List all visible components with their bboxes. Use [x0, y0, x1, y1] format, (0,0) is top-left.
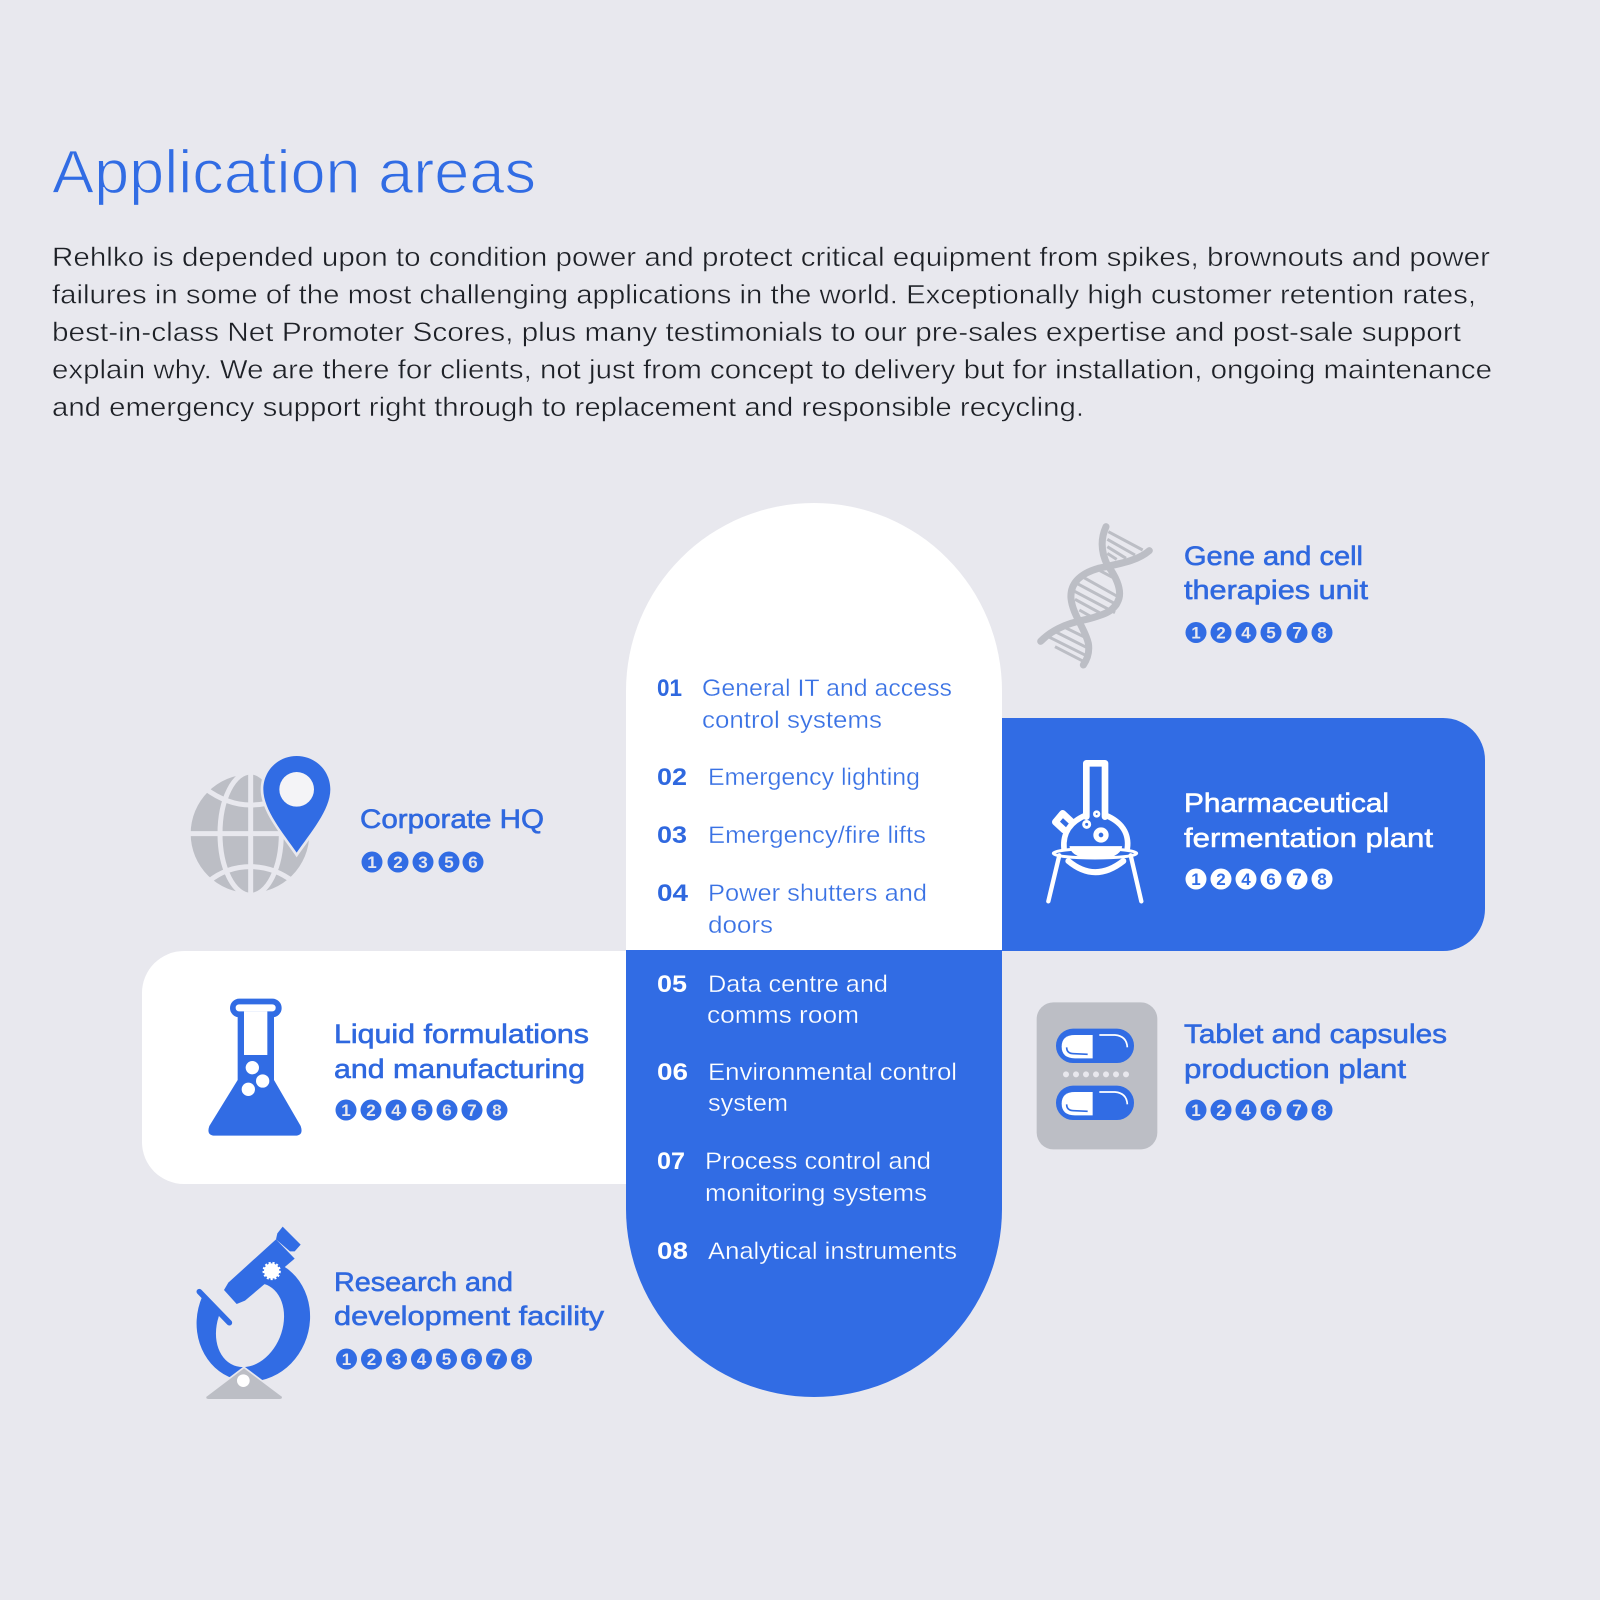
list: applications 01 to 04: Emergency lighting — [708, 764, 920, 791]
badges: tablet and capsules — [1186, 1100, 1332, 1120]
panel: liquid formulations white arm — [142, 951, 626, 1184]
badges: pharmaceutical: 4 — [1241, 870, 1251, 889]
badges: corporate HQ: 6 — [468, 853, 478, 872]
badges: liquid formulations — [336, 1100, 508, 1120]
badges: tablet and capsules: 1 — [1191, 1101, 1201, 1120]
icon: microscope — [183, 1227, 310, 1399]
title: Application areas — [52, 138, 536, 206]
badges: pharmaceutical: 8 — [1317, 870, 1327, 889]
list: applications 01 to 04: doors — [708, 912, 773, 939]
badges: pharmaceutical: 6 — [1266, 870, 1276, 889]
badges: tablet and capsules: 8 — [1317, 1101, 1327, 1120]
heading: Gene and cell therapies unit: therapies unit — [1184, 575, 1369, 605]
badges: liquid formulations: 4 — [391, 1101, 401, 1120]
badges: gene and cell: 8 — [1317, 624, 1327, 642]
intro paragraph: Rehlko is depended upon to condition power and protect critical equipment from spikes, brownouts and power — [52, 242, 1490, 272]
badges: gene and cell: 7 — [1292, 624, 1302, 642]
intro paragraph: and emergency support right through to replacement and responsible recycling. — [52, 392, 1084, 422]
heading: Tablet and capsules production plant — [1184, 1019, 1447, 1084]
badges: liquid formulations: 7 — [467, 1101, 477, 1120]
badges: pharmaceutical: 7 — [1292, 870, 1302, 889]
panel: centre pill top white — [626, 503, 1002, 950]
badges: tablet and capsules: 2 — [1216, 1101, 1226, 1120]
list: applications 01 to 04: control systems — [702, 707, 882, 734]
badges: tablet and capsules: 6 — [1266, 1101, 1276, 1120]
intro paragraph — [52, 242, 1492, 422]
list: applications 05 to 08: 06 — [657, 1059, 688, 1086]
list: applications 05 to 08: comms room — [707, 1002, 859, 1029]
heading: Pharmaceutical fermentation plant: fermentation plant — [1184, 823, 1434, 853]
badges: pharmaceutical: 1 — [1191, 870, 1201, 889]
icon: DNA helix — [1041, 527, 1149, 665]
list: applications 05 to 08: Data centre and — [708, 971, 888, 998]
badges: corporate HQ: 2 — [393, 853, 403, 872]
list: applications 05 to 08: system — [708, 1090, 788, 1117]
list: applications 05 to 08: 08 — [657, 1238, 688, 1265]
list: applications 01 to 04: 02 — [657, 764, 687, 791]
list: applications 05 to 08: Analytical instruments — [708, 1238, 957, 1265]
list: applications 01 to 04 — [657, 675, 952, 939]
badges: research and development: 1 — [342, 1350, 351, 1369]
badges: corporate HQ — [362, 852, 484, 872]
badges: research and development: 2 — [367, 1350, 376, 1369]
badges: liquid formulations: 2 — [366, 1101, 376, 1120]
badges: research and development: 3 — [392, 1350, 401, 1369]
heading: Tablet and capsules production plant: production plant — [1184, 1054, 1407, 1084]
list: applications 05 to 08: 05 — [657, 971, 687, 998]
panel: pharmaceutical blue arm — [1002, 718, 1485, 951]
list: applications 01 to 04: 01 — [657, 675, 682, 702]
badges: corporate HQ: 5 — [444, 853, 454, 872]
icon: capsules tile — [1037, 1002, 1157, 1149]
badges: corporate HQ: 1 — [367, 853, 377, 872]
list: applications 05 to 08: 07 — [657, 1148, 685, 1175]
panel: centre pill bottom blue — [626, 950, 1002, 1397]
list: applications 05 to 08: Process control and — [705, 1148, 931, 1175]
heading: Gene and cell therapies unit: Gene and cell — [1184, 541, 1363, 571]
badges: gene and cell: 4 — [1241, 624, 1251, 642]
badges: gene and cell — [1186, 622, 1332, 643]
list: applications 01 to 04: Emergency/fire lifts — [708, 822, 926, 849]
badges: liquid formulations: 8 — [492, 1101, 502, 1120]
badges: corporate HQ: 3 — [418, 853, 428, 872]
badges: research and development: 6 — [467, 1350, 476, 1369]
icon: fermentation flask — [1048, 763, 1141, 901]
icon: globe with location pin — [188, 756, 330, 895]
badges: tablet and capsules: 7 — [1292, 1101, 1302, 1120]
list: applications 01 to 04: Power shutters and — [708, 880, 927, 907]
heading: Corporate HQ: Corporate HQ — [360, 804, 544, 834]
list: applications 05 to 08 — [657, 971, 957, 1265]
list: applications 05 to 08: monitoring systems — [705, 1180, 927, 1207]
badges: liquid formulations: 5 — [417, 1101, 427, 1120]
badges: tablet and capsules: 4 — [1241, 1101, 1251, 1120]
heading: Pharmaceutical fermentation plant: Pharmaceutical — [1184, 788, 1389, 818]
badges: gene and cell: 1 — [1191, 624, 1201, 642]
heading: Research and development facility: development facility — [334, 1301, 605, 1331]
badges: gene and cell: 2 — [1216, 624, 1226, 642]
intro paragraph: failures in some of the most challenging applications in the world. Exceptionally high customer retention rates, — [52, 280, 1476, 310]
badges: gene and cell: 5 — [1266, 624, 1276, 642]
badges: research and development — [336, 1348, 532, 1370]
badges: research and development: 4 — [417, 1350, 427, 1369]
icon: conical flask — [208, 999, 302, 1136]
badges: liquid formulations: 1 — [341, 1101, 351, 1120]
list: applications 01 to 04: 03 — [657, 822, 687, 849]
heading: Gene and cell therapies unit — [1184, 541, 1369, 605]
heading: Tablet and capsules production plant: Tablet and capsules — [1184, 1019, 1447, 1049]
badges: research and development: 5 — [442, 1350, 451, 1369]
heading: Liquid formulations and manufacturing: Liquid formulations — [334, 1019, 589, 1049]
heading: Pharmaceutical fermentation plant — [1184, 788, 1434, 853]
heading: Liquid formulations and manufacturing: and manufacturing — [334, 1054, 585, 1084]
heading: Liquid formulations and manufacturing — [334, 1019, 589, 1084]
list: applications 01 to 04: General IT and access — [702, 675, 952, 702]
list: applications 01 to 04: 04 — [657, 880, 689, 907]
heading: Research and development facility — [334, 1267, 605, 1331]
badges: pharmaceutical: 2 — [1216, 870, 1226, 889]
badges: research and development: 8 — [517, 1350, 526, 1369]
intro paragraph: explain why. We are there for clients, not just from concept to delivery but for installation, ongoing maintenance — [52, 354, 1492, 384]
badges: pharmaceutical — [1186, 868, 1332, 890]
badges: research and development: 7 — [492, 1350, 501, 1369]
intro paragraph: best-in-class Net Promoter Scores, plus many testimonials to our pre-sales expertise and post-sale support — [52, 317, 1462, 347]
badges: liquid formulations: 6 — [442, 1101, 452, 1120]
heading: Research and development facility: Research and — [334, 1267, 513, 1297]
list: applications 05 to 08: Environmental control — [708, 1059, 957, 1086]
